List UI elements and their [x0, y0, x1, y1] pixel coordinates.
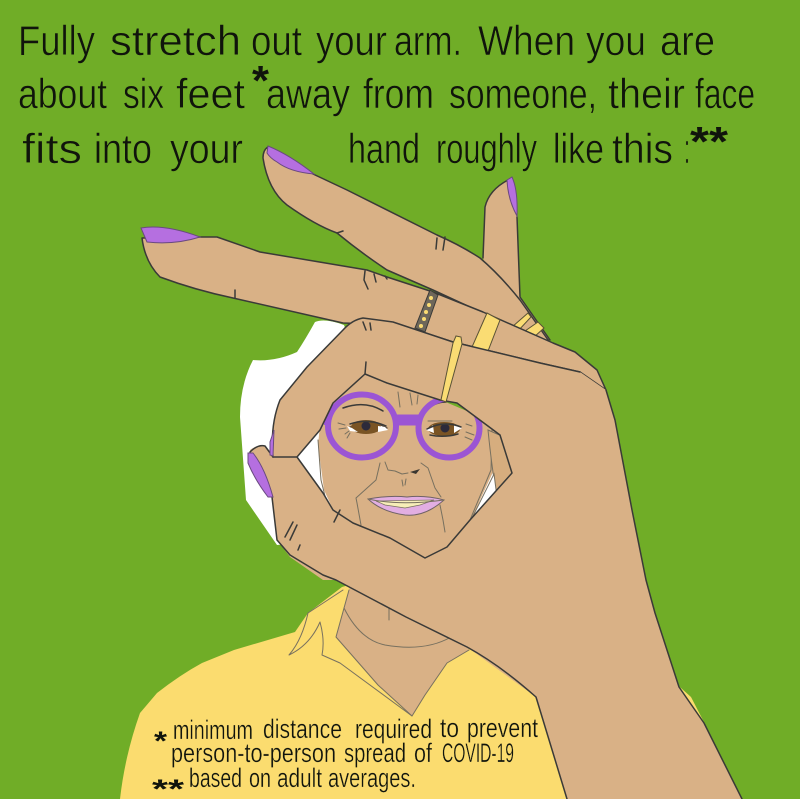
- instruction heading: away: [266, 70, 350, 117]
- instruction heading: Fully: [18, 17, 95, 64]
- footnotes: of: [414, 738, 432, 768]
- pinky finger: [483, 177, 550, 340]
- instruction heading: fits: [22, 125, 82, 172]
- instruction heading: about: [18, 70, 107, 117]
- footnotes: distance: [263, 714, 342, 744]
- eyebrows: [343, 402, 446, 411]
- footnotes: spread: [344, 738, 406, 768]
- left eye: [338, 420, 388, 438]
- instruction heading: their: [608, 70, 685, 117]
- purple nail: [507, 177, 517, 216]
- instruction heading: from: [363, 70, 434, 117]
- footnotes: on: [249, 763, 271, 793]
- face details: [324, 392, 480, 532]
- hair strand right: [488, 430, 512, 497]
- instruction heading: into: [94, 125, 152, 172]
- gold band ring: [472, 313, 500, 351]
- face: [318, 368, 500, 564]
- lower index finger: [141, 227, 606, 390]
- instruction heading: like: [553, 125, 604, 172]
- yellow shirt: [120, 585, 706, 799]
- instruction heading: someone,: [449, 70, 597, 117]
- instruction heading: this: [612, 125, 673, 172]
- instruction heading: you: [586, 17, 646, 64]
- purple nail: [267, 146, 314, 174]
- instruction heading: out: [251, 17, 302, 64]
- instruction heading: **: [690, 118, 729, 165]
- footnotes: required: [355, 714, 432, 744]
- footnotes: based: [189, 763, 242, 793]
- small gold rings: [512, 313, 544, 338]
- footnotes: adult: [277, 763, 322, 793]
- instruction heading: face: [695, 70, 755, 117]
- small index nail: [270, 430, 274, 456]
- white gap right: [472, 474, 497, 518]
- instruction heading: six: [123, 70, 164, 117]
- instruction heading: stretch: [110, 17, 241, 64]
- white hair left: [240, 321, 380, 545]
- beaded ring: [415, 290, 438, 332]
- right eye: [426, 421, 474, 440]
- instruction heading: roughly: [436, 125, 537, 172]
- footnotes: averages.: [328, 763, 416, 793]
- instruction heading: When: [478, 17, 575, 64]
- main hand: [250, 318, 742, 799]
- thumb nail: [248, 453, 273, 497]
- footnotes: *: [154, 726, 168, 756]
- instruction heading: arm.: [394, 17, 462, 64]
- forehead lines: [398, 392, 418, 407]
- instruction heading: :: [684, 125, 690, 172]
- footnotes: prevent: [467, 713, 538, 743]
- instruction heading: hand: [348, 125, 420, 172]
- instruction heading: *: [252, 57, 270, 104]
- neck: [336, 585, 469, 716]
- nose and wrinkles: [385, 462, 408, 474]
- footnotes: person-to-person: [171, 738, 336, 768]
- instruction heading: your: [170, 125, 243, 172]
- footnotes: [152, 713, 538, 799]
- footnotes: minimum: [173, 715, 253, 745]
- instruction heading: [18, 17, 755, 172]
- shirt collar: [289, 590, 412, 716]
- instruction heading: are: [660, 17, 715, 64]
- mouth: [368, 496, 444, 515]
- thin gold ring: [441, 336, 462, 402]
- white hair right: [468, 430, 515, 522]
- footnotes: to: [440, 713, 459, 743]
- instruction heading: your: [316, 17, 387, 64]
- glasses: [324, 394, 480, 458]
- instruction heading: feet: [176, 70, 245, 117]
- long middle finger: [263, 146, 553, 347]
- footnotes: COVID-19: [442, 738, 514, 768]
- purple nail: [141, 227, 200, 243]
